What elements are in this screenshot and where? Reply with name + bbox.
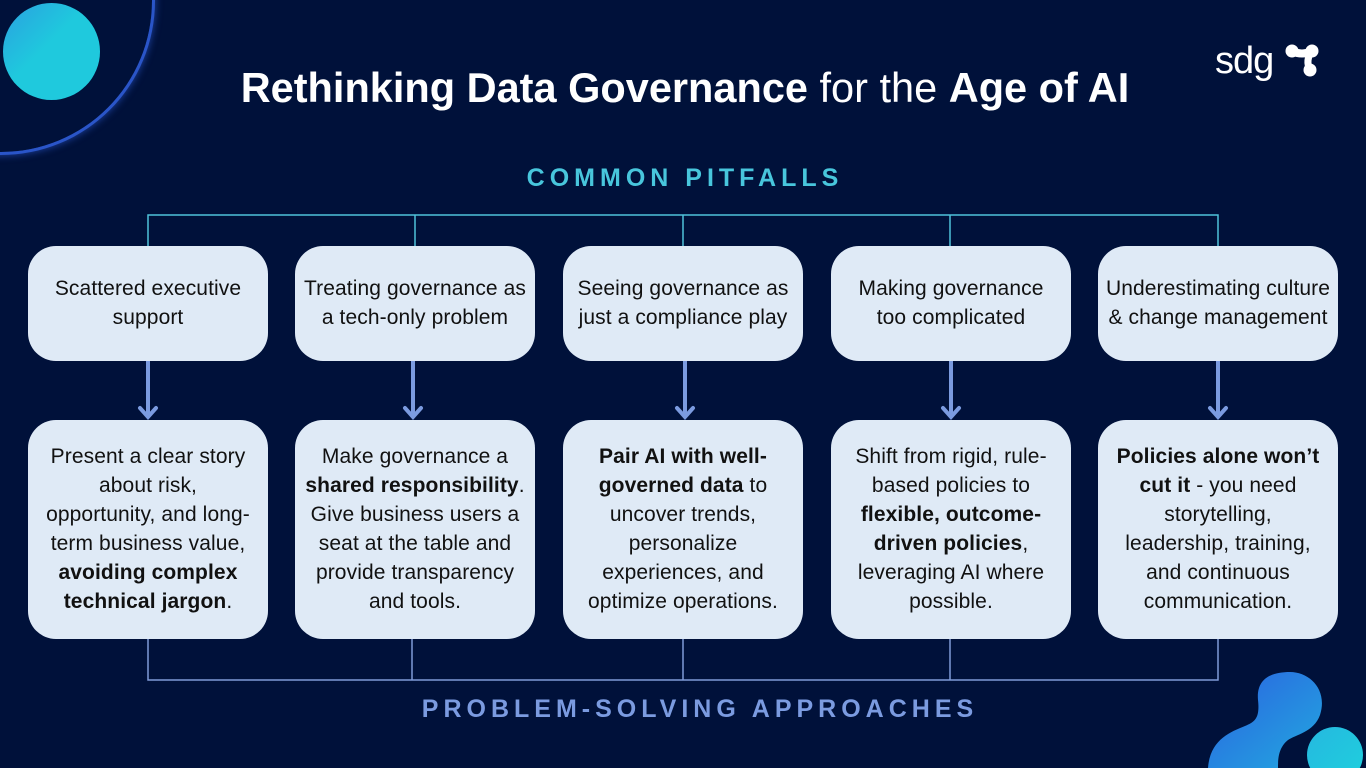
- logo: sdg: sdg: [1215, 40, 1273, 82]
- text: provide transparency: [316, 561, 514, 584]
- text: Shift from rigid, rule-: [855, 445, 1047, 468]
- solution cards: [28, 420, 268, 639]
- pitfall cards: [28, 246, 268, 361]
- text: & change management: [1108, 306, 1328, 329]
- solution cards: about risk,: [99, 474, 197, 497]
- pitfall cards: support: [113, 306, 183, 329]
- text: uncover trends,: [610, 503, 756, 526]
- text: storytelling,: [1164, 503, 1272, 526]
- pitfall cards: Scattered executive: [55, 277, 241, 300]
- solution cards: term business value,: [51, 532, 245, 555]
- solution cards: avoiding complex: [58, 561, 237, 584]
- logo: sdg: [1215, 40, 1318, 82]
- text: leveraging AI where: [858, 561, 1044, 584]
- text: cut it - you need: [1140, 474, 1296, 497]
- text: Give business users a: [311, 503, 519, 526]
- text: Policies alone won’t: [1117, 445, 1319, 468]
- arrows: [138, 361, 1228, 420]
- heading: problem-solving approaches: PROBLEM-SOLVING APPROACHES: [422, 695, 978, 723]
- text: Making governance: [858, 277, 1043, 300]
- text: communication.: [1144, 590, 1292, 613]
- text: and tools.: [369, 590, 461, 613]
- text: Treating governance as: [304, 277, 526, 300]
- text: leadership, training,: [1125, 532, 1311, 555]
- solution cards: technical jargon.: [64, 590, 232, 613]
- text: personalize: [629, 532, 737, 555]
- text: Pair AI with well-: [599, 445, 767, 468]
- text: flexible, outcome-: [861, 503, 1041, 526]
- text: and continuous: [1146, 561, 1290, 584]
- text: too complicated: [877, 306, 1025, 329]
- solution cards: opportunity, and long-: [46, 503, 250, 526]
- text: just a compliance play: [579, 306, 787, 329]
- decoration: top-left circles: [0, 0, 160, 160]
- text: possible.: [909, 590, 993, 613]
- text: driven policies,: [874, 532, 1028, 555]
- text: Underestimating culture: [1106, 277, 1330, 300]
- solution cards: Present a clear story: [51, 445, 245, 468]
- text: seat at the table and: [319, 532, 511, 555]
- text: a tech-only problem: [322, 306, 508, 329]
- text: shared responsibility.: [305, 474, 525, 497]
- text: based policies to: [872, 474, 1030, 497]
- title: Rethinking Data Governance for the Age of AI: [241, 64, 1129, 111]
- heading: common pitfalls: COMMON PITFALLS: [527, 164, 843, 192]
- text: Seeing governance as: [578, 277, 788, 300]
- decoration: bottom-right blobs: [1208, 672, 1363, 768]
- text: optimize operations.: [588, 590, 778, 613]
- text: Make governance a: [322, 445, 508, 468]
- text: experiences, and: [602, 561, 764, 584]
- text: governed data to: [599, 474, 767, 497]
